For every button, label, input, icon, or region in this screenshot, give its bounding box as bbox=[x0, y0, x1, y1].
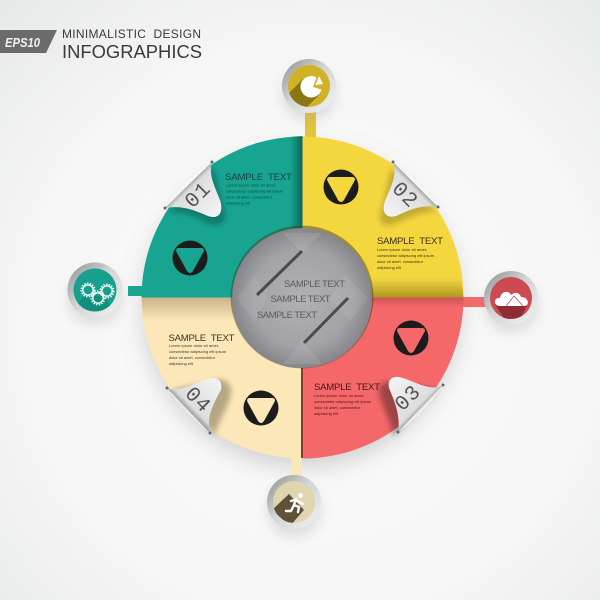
hub text: SAMPLE TEXT bbox=[257, 310, 317, 321]
icon: triangle badge 03 bbox=[394, 320, 428, 356]
panel: 01 teal quadrant bbox=[142, 136, 302, 298]
icon: right clouds button bbox=[484, 271, 538, 333]
hub slash lines bbox=[257, 251, 348, 343]
text block 03: Lorem ipsum dolor sit amet, bbox=[314, 393, 364, 398]
panel: 03 coral quadrant bbox=[302, 298, 464, 459]
text block 01: dolor sit amet, consectetur bbox=[226, 194, 273, 200]
icon: triangle badge 02 bbox=[324, 170, 358, 204]
disk drop shadow bbox=[144, 150, 460, 466]
text block 04: adipiscing elit bbox=[169, 361, 194, 366]
icon: bottom runner button bbox=[267, 475, 321, 537]
title bbox=[62, 27, 202, 62]
text block 02: dolor sit amet, consectetur bbox=[377, 259, 424, 264]
text block 02: Lorem ipsum dolor sit amet, bbox=[377, 247, 427, 252]
icon: top pie chart button bbox=[282, 59, 336, 121]
badge: EPS10: EPS10 bbox=[5, 36, 40, 50]
fold 01 bbox=[164, 160, 225, 225]
connector: bottom tab bbox=[291, 454, 302, 478]
icon: triangle badge 01 bbox=[172, 240, 208, 276]
connector: right tab bbox=[460, 297, 488, 307]
title: MINIMALISTIC DESIGN bbox=[62, 27, 201, 41]
fold 02 bbox=[380, 160, 440, 225]
hub text bbox=[257, 279, 345, 321]
heading: sample text 02: SAMPLE TEXT bbox=[377, 236, 443, 247]
text block 04 bbox=[169, 343, 226, 366]
fold 03 bbox=[379, 377, 444, 436]
badge: EPS10 bbox=[0, 30, 57, 53]
panel: 02 yellow quadrant bbox=[302, 136, 464, 298]
text block 03: consectetur adipiscing elit ipsum bbox=[314, 399, 371, 404]
text block 02: adipiscing elit bbox=[377, 265, 402, 270]
text block 02 bbox=[377, 247, 434, 270]
text block 04: dolor sit amet, consectetur bbox=[169, 355, 216, 360]
text block 01: consectetur adipiscing elit ipsum bbox=[226, 188, 283, 194]
connector: top tab bbox=[305, 112, 316, 142]
text block 03: adipiscing elit bbox=[314, 411, 339, 416]
fold 03: 03 bbox=[391, 381, 427, 417]
fold 04 bbox=[166, 378, 231, 435]
panel: 04 cream quadrant bbox=[142, 298, 303, 459]
icon: left gears button bbox=[68, 262, 122, 325]
text block 01: Lorem ipsum dolor sit amet, bbox=[226, 182, 276, 188]
text block 01 bbox=[226, 182, 283, 206]
text block 03 bbox=[314, 393, 371, 416]
fold 02: 02 bbox=[386, 178, 422, 214]
text block 04: consectetur adipiscing elit ipsum bbox=[169, 349, 226, 354]
text block 01: adipiscing elit bbox=[226, 200, 251, 206]
heading: sample text 04: SAMPLE TEXT bbox=[168, 333, 235, 344]
fold 01: 01 bbox=[181, 178, 217, 214]
hub facets bbox=[237, 233, 368, 364]
text block 03: dolor sit amet, consectetur bbox=[314, 405, 361, 410]
connector: left tab bbox=[128, 286, 146, 296]
hub text: SAMPLE TEXT bbox=[284, 279, 345, 290]
heading: sample text 03: SAMPLE TEXT bbox=[314, 382, 380, 393]
hub text: SAMPLE TEXT bbox=[270, 294, 331, 305]
icon: triangle badge 04 bbox=[244, 390, 278, 426]
fold 04: 04 bbox=[179, 383, 215, 419]
title: INFOGRAPHICS bbox=[62, 41, 202, 62]
panel: central hub bbox=[230, 226, 374, 368]
text block 04: Lorem ipsum dolor sit amet, bbox=[169, 343, 219, 348]
text block 02: consectetur adipiscing elit ipsum bbox=[377, 253, 434, 258]
heading: sample text 01: SAMPLE TEXT bbox=[225, 172, 292, 183]
